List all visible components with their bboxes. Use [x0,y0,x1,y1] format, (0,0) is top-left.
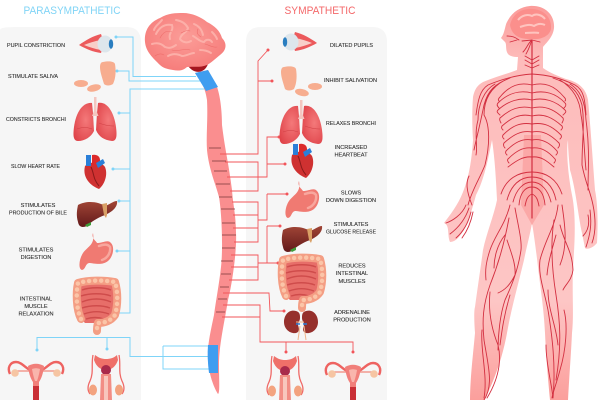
label: dilated pupils: DILATED PUPILS [330,43,373,49]
label: slow heart rate: SLOW HEART RATE [11,164,60,170]
parasympathetic labels [6,43,67,318]
panel: sympathetic background [246,27,387,400]
body silhouette [444,6,598,400]
label: relaxes bronchi: RELAXES BRONCHI [326,121,376,127]
label: adrenaline production: ADRENALINE [334,310,370,316]
organ: right lungs [279,100,323,144]
label: stimulates production of bile: PRODUCTION OF BILE [9,210,67,216]
label: increased heartbeat: INCREASED [335,145,367,151]
organ: right male reproductive system [267,356,303,400]
organ: right salivary glands [281,66,322,97]
label: stimulates production of bile: STIMULATES [21,203,56,209]
central spine and rib nerves [476,36,586,218]
label: slows down digestion: SLOWS [341,190,361,196]
organ: right stomach [285,181,319,218]
organ: left heart [84,155,106,189]
label: slows down digestion: DOWN DIGESTION [326,198,376,204]
brain in head [510,9,551,39]
label: reduces intestinal muscles: MUSCLES [338,279,366,285]
label: intestinal muscle relaxation: MUSCLE [24,304,48,310]
label: stimulates glucose release: GLUCOSE RELEASE [326,230,376,236]
label: intestinal muscle relaxation: INTESTINAL [20,296,52,302]
sympathetic labels [324,43,377,324]
label: reduces intestinal muscles: REDUCES [338,264,366,270]
label: stimulate saliva: STIMULATE SALIVA [8,74,58,80]
label: inhibit salivation: INHIBIT SALIVATION [324,78,377,84]
blue connector lines [36,36,210,369]
organ: left lungs [73,97,117,141]
label: adrenaline production: PRODUCTION [333,318,371,324]
brain [145,13,226,72]
label: increased heartbeat: HEARTBEAT [334,152,368,158]
organ: right eye [283,32,317,51]
label: reduces intestinal muscles: INTESTINAL [336,271,368,277]
organ: left intestines [77,281,117,331]
organ: left uterus [9,362,63,400]
organ: right liver [282,226,322,252]
organ: right uterus [326,363,380,400]
human body figure with nervous system [444,6,598,400]
organ: kidneys [284,311,318,340]
label: stimulates digestion: STIMULATES [19,248,54,254]
label: intestinal muscle relaxation: RELAXATION [18,312,54,318]
red connector lines [220,48,354,354]
leg nerves [482,205,573,400]
label: constricts bronchi: CONSTRICTS BRONCHI [6,117,66,123]
label: pupil constriction: PUPIL CONSTRICTION [7,43,65,49]
label: stimulates glucose release: STIMULATES [334,222,369,228]
organ: left male reproductive system [88,355,124,400]
organ: left salivary glands [74,61,116,93]
spinal cord [195,70,236,394]
heading: parasympathetic: PARASYMPATHETIC [24,5,121,17]
label: stimulates digestion: DIGESTION [21,255,51,261]
organ: left liver [77,201,117,227]
darker band along the spine [521,135,544,225]
panel: parasympathetic background [0,27,141,400]
organ: left eye [79,34,113,53]
arm and hand nerves [446,78,595,247]
organ: right intestines [282,258,322,308]
organ: left stomach [79,233,113,270]
heading: sympathetic: SYMPATHETIC [284,5,356,17]
organ: right heart [291,144,313,178]
